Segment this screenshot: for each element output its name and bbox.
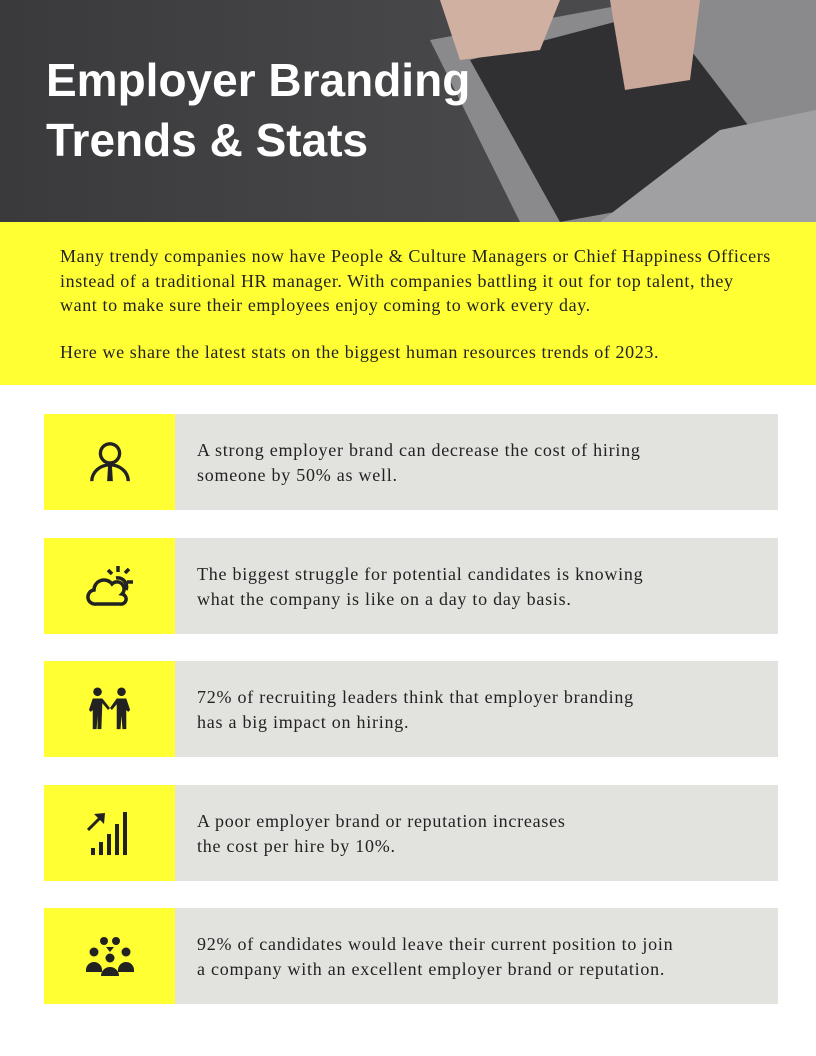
- text: the cost per hire by 10%.: [197, 836, 396, 856]
- row 3: [44, 661, 778, 757]
- title: [46, 54, 470, 166]
- icon: group of people: [44, 908, 175, 1004]
- text: [197, 564, 643, 609]
- row 1: [44, 414, 778, 510]
- row 4: [44, 785, 778, 881]
- text: [197, 687, 634, 732]
- text: [197, 934, 673, 979]
- title: Employer Branding: [46, 54, 470, 106]
- text: 92% of candidates would leave their current position to join: [197, 934, 673, 954]
- text: The biggest struggle for potential candidates is knowing: [197, 564, 643, 584]
- title: Trends & Stats: [46, 114, 368, 166]
- intro panel: [0, 222, 816, 385]
- row 5: [44, 908, 778, 1004]
- icon: growth bars: [44, 785, 175, 881]
- text: has a big impact on hiring.: [197, 712, 409, 732]
- icon: person with tie: [44, 414, 175, 510]
- text: 72% of recruiting leaders think that employer branding: [197, 687, 634, 707]
- text: someone by 50% as well.: [197, 464, 398, 484]
- intro panel: Here we share the latest stats on the biggest human resources trends of 2023.: [60, 342, 659, 362]
- intro panel: want to make sure their employees enjoy coming to work every day.: [60, 295, 591, 315]
- text: [197, 440, 641, 485]
- text: A poor employer brand or reputation increases: [197, 811, 566, 831]
- row 2: [44, 538, 778, 634]
- text: A strong employer brand can decrease the cost of hiring: [197, 440, 641, 460]
- text: [197, 811, 566, 856]
- text: what the company is like on a day to day basis.: [197, 588, 572, 608]
- icon: cloud and sun: [44, 538, 175, 634]
- text: a company with an excellent employer brand or reputation.: [197, 958, 665, 978]
- header photo: [0, 0, 816, 222]
- intro panel: instead of a traditional HR manager. With companies battling it out for top talent, they: [60, 270, 734, 290]
- intro panel: Many trendy companies now have People & Culture Managers or Chief Happiness Officers: [60, 246, 771, 266]
- icon: handshake people: [44, 661, 175, 757]
